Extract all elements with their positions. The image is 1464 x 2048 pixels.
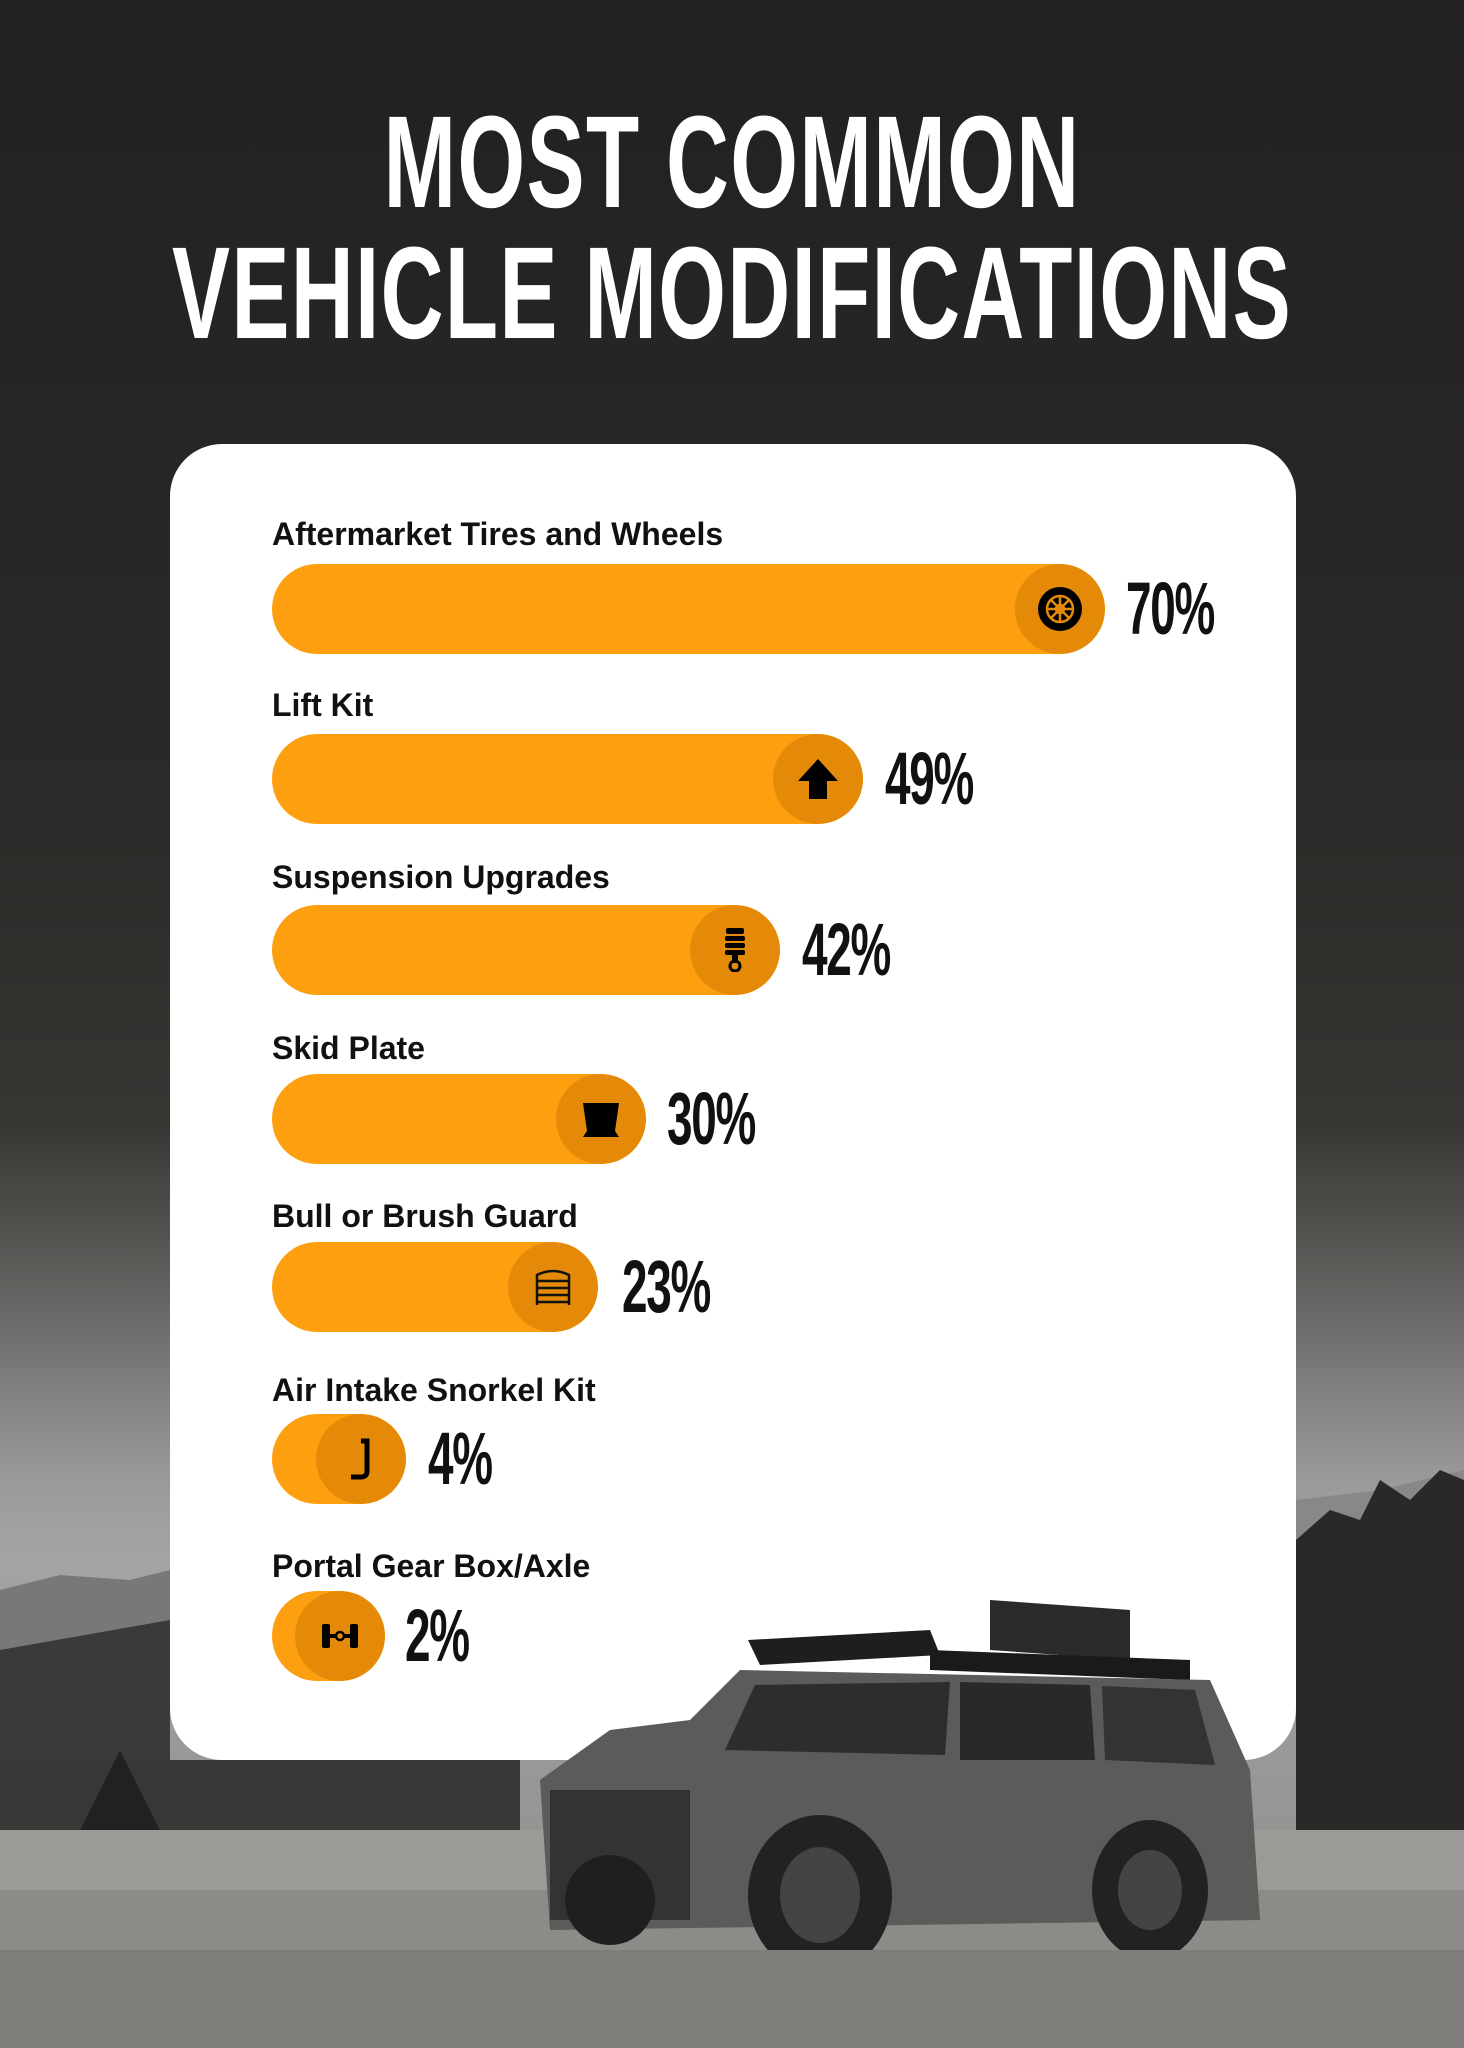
vehicle photo — [540, 1600, 1260, 1950]
row: lift kit — [272, 687, 974, 824]
text: 49% — [885, 737, 973, 820]
row: tires — [272, 516, 1214, 654]
row: portal gear — [272, 1548, 590, 1681]
title — [172, 88, 1292, 366]
row: snorkel — [272, 1372, 596, 1504]
text: 23% — [622, 1245, 710, 1328]
text: Skid Plate — [272, 1030, 425, 1066]
row: suspension — [272, 859, 890, 995]
row: bull guard — [272, 1198, 710, 1332]
text: 30% — [667, 1077, 755, 1160]
text: Suspension Upgrades — [272, 859, 610, 895]
text: 42% — [802, 908, 890, 991]
title: MOST COMMON — [384, 88, 1080, 235]
row: skid plate — [272, 1030, 756, 1164]
text: Bull or Brush Guard — [272, 1198, 578, 1234]
panel: chart card — [170, 444, 1296, 1760]
text: 4% — [428, 1417, 492, 1500]
text: Air Intake Snorkel Kit — [272, 1372, 596, 1408]
text: Portal Gear Box/Axle — [272, 1548, 590, 1584]
title: VEHICLE MODIFICATIONS — [172, 219, 1292, 366]
text: 70% — [1126, 567, 1214, 650]
text: Lift Kit — [272, 687, 373, 723]
text: Aftermarket Tires and Wheels — [272, 516, 723, 552]
text: 2% — [405, 1594, 469, 1677]
